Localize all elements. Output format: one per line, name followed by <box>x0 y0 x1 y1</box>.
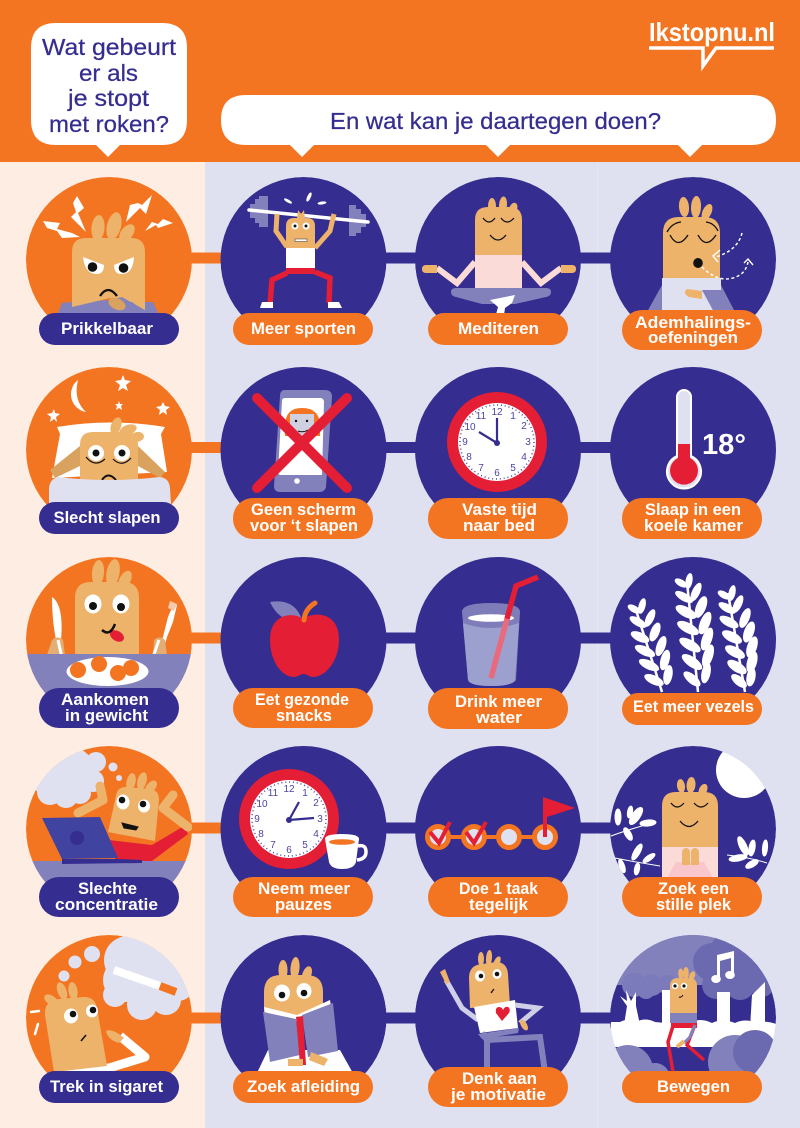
connectors: row 4 <box>190 822 612 834</box>
label: Bewegen: Bewegen <box>657 1078 730 1096</box>
icon: irritated character <box>26 177 192 316</box>
background: left column <box>0 162 205 1128</box>
logo: Ikstopnu.nl: Ikstopnu.nl <box>649 17 775 47</box>
label: Doe 1 taak tegelijk: tegelijk <box>469 896 529 914</box>
icon: clock and coffee cup: 8 <box>258 829 264 840</box>
heading bubble: left question: Wat gebeurt <box>42 34 177 60</box>
icon: crossed-out phone <box>220 367 386 533</box>
label: Denk aan je motivatie <box>428 1067 568 1107</box>
label: Slechte concentratie <box>39 877 179 917</box>
label: Eet gezonde snacks <box>233 688 373 728</box>
icon: red apple <box>220 557 386 723</box>
label: Ademhalingsoefeningen: Ademhalings- <box>635 314 751 332</box>
label: Drink meer water <box>428 688 568 729</box>
label: Vaste tijd naar bed <box>428 498 568 539</box>
label: Mediteren <box>428 313 568 345</box>
icon: clock and coffee cup: 5 <box>302 840 308 851</box>
panel: Slecht slapen <box>26 367 192 534</box>
icon: clock at ten: 12 <box>491 407 503 418</box>
connectors: row 3 <box>190 632 612 644</box>
label: Slechte concentratie: concentratie <box>55 896 158 914</box>
label: Zoek een stille plek <box>622 877 762 917</box>
icon: breathing character <box>610 177 776 315</box>
icon: clock at ten: 6 <box>494 468 500 479</box>
icon: thermometer 18 degrees <box>610 367 776 533</box>
panel: Aankomen in gewicht <box>26 557 192 728</box>
label: Slaap in een koele kamer: koele kamer <box>644 517 744 535</box>
label: Ademhalingsoefeningen <box>622 310 762 350</box>
panel: Slechte concentratie <box>26 746 192 917</box>
label: Neem meer pauzes: pauzes <box>275 896 332 914</box>
label: Drink meer water: Drink meer <box>455 693 543 711</box>
icon: clock at ten: 3 <box>525 437 531 448</box>
panel: Vaste tijd naar bed <box>415 367 581 539</box>
icon: clock and coffee cup: 9 <box>254 814 260 825</box>
label: Zoek een stille plek: stille plek <box>656 896 732 914</box>
label: Zoek een stille plek: Zoek een <box>658 880 729 898</box>
icon: clock and coffee cup: 11 <box>268 788 279 799</box>
label: Eet gezonde snacks: Eet gezonde <box>255 691 349 709</box>
label: Slechte concentratie: Slechte <box>78 880 137 898</box>
icon: distracted character at laptop <box>26 746 192 882</box>
icon: clock and coffee cup: 2 <box>313 798 319 809</box>
icon: weightlifter <box>220 177 386 316</box>
icon: meditating character <box>415 177 581 316</box>
icon: clock and coffee cup: 4 <box>313 829 319 840</box>
icon: sleepless character <box>26 367 192 504</box>
label: Eet gezonde snacks: snacks <box>276 707 332 725</box>
icon: clock at ten: 11 <box>476 411 487 422</box>
label: Doe 1 taak tegelijk <box>428 877 568 917</box>
label: Slecht slapen <box>39 502 179 534</box>
label: Prikkelbaar: Prikkelbaar <box>61 320 154 338</box>
icon: clock and coffee cup: 10 <box>256 799 268 810</box>
label: Drink meer water: water <box>475 709 523 727</box>
connectors: row 2 <box>190 442 612 453</box>
heading bubble: left question: met roken? <box>49 111 169 137</box>
panel: Ademhalingsoefeningen <box>610 177 776 350</box>
icon: clock at ten: 4 <box>521 452 527 463</box>
heading bubble: left question: er als <box>79 60 138 86</box>
panel: Neem meer pauzes <box>220 746 386 917</box>
label: Prikkelbaar <box>39 313 179 345</box>
icon: wheat stalks <box>610 557 776 723</box>
icon: checklist path to flag <box>415 746 581 912</box>
panel: Bewegen <box>610 935 776 1103</box>
label: Mediteren: Mediteren <box>458 320 539 338</box>
icon: clock and coffee cup: 1 <box>302 788 308 799</box>
icon: clock and coffee cup: 3 <box>317 814 323 825</box>
panel: Eet gezonde snacks <box>220 557 386 728</box>
panel: Doe 1 taak tegelijk <box>415 746 581 917</box>
label: Neem meer pauzes: Neem meer <box>258 880 351 898</box>
heading bubble: right question: En wat kan je daartegen doen? <box>330 108 661 134</box>
label: Slecht slapen: Slecht slapen <box>54 509 160 527</box>
label: Neem meer pauzes <box>233 877 373 917</box>
icon: clock at ten: 7 <box>478 463 484 474</box>
panel: Eet meer vezels <box>610 557 776 725</box>
label: Doe 1 taak tegelijk: Doe 1 taak <box>459 880 539 898</box>
label: Slaap in een koele kamer: Slaap in een <box>645 501 741 519</box>
icon: clock at ten: 2 <box>521 421 527 432</box>
label: Vaste tijd naar bed: Vaste tijd <box>462 501 537 519</box>
icon: calm character with moon and leaves <box>610 746 776 883</box>
label: Eet meer vezels: Eet meer vezels <box>633 698 754 716</box>
heading bubble: left question <box>31 23 187 157</box>
connectors: row 5 <box>190 1012 612 1024</box>
header band <box>0 0 800 162</box>
logo: Ikstopnu.nl <box>649 17 775 66</box>
panel: Meer sporten <box>220 177 386 345</box>
label: Denk aan je motivatie: je motivatie <box>450 1086 546 1104</box>
connectors: row 1 <box>190 252 612 264</box>
icon: character walking in forest with music <box>610 935 776 1074</box>
icon: character thinking of cigarette <box>26 935 192 1074</box>
label: Meer sporten <box>233 313 373 345</box>
label: Vaste tijd naar bed: naar bed <box>463 517 535 535</box>
label: Aankomen in gewicht: in gewicht <box>65 707 149 725</box>
label: Geen scherm voor 't slapen: Geen scherm <box>251 501 356 519</box>
label: Zoek afleiding: Zoek afleiding <box>247 1078 360 1096</box>
icon: clock at ten: 9 <box>462 437 468 448</box>
icon: clock and coffee cup <box>220 746 386 912</box>
icon: clock at ten: 10 <box>464 422 476 433</box>
label: Aankomen in gewicht <box>39 688 179 728</box>
panel: Zoek een stille plek <box>610 742 776 917</box>
icon: clock at ten <box>415 367 581 533</box>
label: Zoek afleiding <box>233 1071 373 1103</box>
icon: clock at ten: 8 <box>466 452 472 463</box>
panel: Denk aan je motivatie <box>415 935 581 1107</box>
heading bubble: right question <box>221 95 776 157</box>
panel: Geen scherm voor 't slapen <box>220 367 386 539</box>
icon: thermometer 18 degrees: 18° <box>702 429 746 461</box>
icon: dancing character with heart <box>415 935 581 1072</box>
icon: clock and coffee cup: 12 <box>283 784 295 795</box>
label: Denk aan je motivatie: Denk aan <box>462 1070 537 1088</box>
panel: Slaap in een koele kamer <box>610 367 776 539</box>
label: Trek in sigaret: Trek in sigaret <box>50 1078 164 1096</box>
icon: character reading book <box>220 935 386 1074</box>
panel: Drink meer water <box>415 557 581 729</box>
icon: clock and coffee cup: 6 <box>286 845 292 856</box>
label: Ademhalingsoefeningen: oefeningen <box>648 329 738 347</box>
label: Trek in sigaret <box>39 1071 179 1103</box>
panel: Trek in sigaret <box>26 930 194 1103</box>
panel: Prikkelbaar <box>26 177 192 345</box>
panel: Mediteren <box>415 177 581 345</box>
label: Aankomen in gewicht: Aankomen <box>61 691 149 709</box>
panel: Zoek afleiding <box>220 935 386 1103</box>
icon: hungry character at table <box>26 557 192 694</box>
label: Slaap in een koele kamer <box>622 498 762 539</box>
label: Geen scherm voor 't slapen <box>233 498 373 539</box>
label: Eet meer vezels <box>622 693 762 725</box>
label: Geen scherm voor 't slapen: voor ‘t slapen <box>250 517 358 535</box>
icon: clock at ten: 1 <box>510 411 516 422</box>
icon: glass of water with straw <box>415 557 581 723</box>
background: right columns <box>205 162 800 1128</box>
label: Bewegen <box>622 1071 762 1103</box>
icon: clock at ten: 5 <box>510 463 516 474</box>
label: Meer sporten: Meer sporten <box>251 320 356 338</box>
heading bubble: left question: je stopt <box>67 85 150 111</box>
icon: clock and coffee cup: 7 <box>270 840 276 851</box>
